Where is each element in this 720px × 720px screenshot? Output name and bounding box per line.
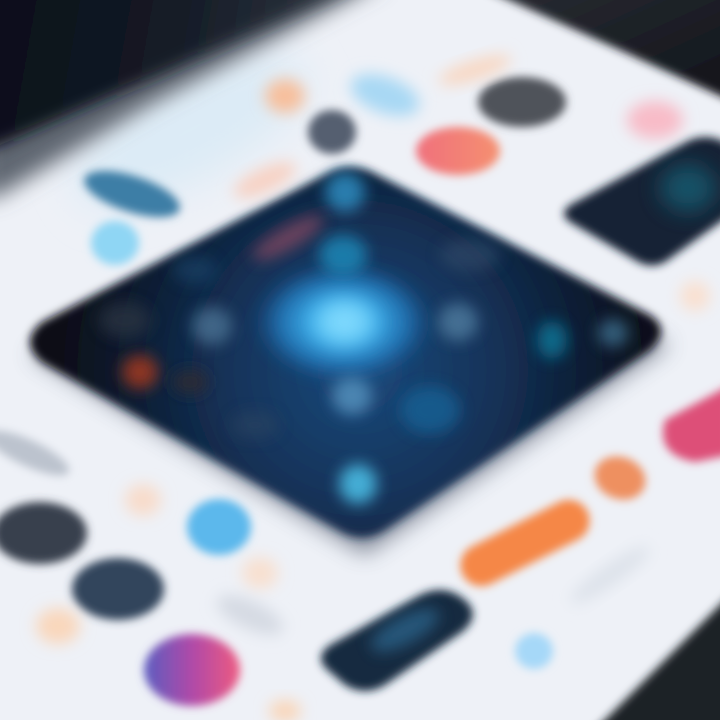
phone highlight xyxy=(365,600,445,660)
central glow xyxy=(251,260,435,384)
small orange dot xyxy=(269,700,301,720)
icons on paper: top area xyxy=(229,49,710,311)
navy round tile xyxy=(72,558,164,620)
node: left xyxy=(192,307,232,345)
dim panel: lower left xyxy=(231,411,279,439)
dim accent: left lower xyxy=(172,370,208,394)
grey transition band xyxy=(0,0,385,200)
orange dot xyxy=(265,79,305,113)
orange dot xyxy=(36,608,80,644)
blue dot: bottom right xyxy=(515,633,553,669)
peach dot lower xyxy=(242,557,278,589)
dim panel: left xyxy=(173,256,217,284)
central tablet device xyxy=(30,167,661,538)
node: far right xyxy=(537,321,567,359)
orange pill xyxy=(453,493,597,593)
dim panel: far left xyxy=(99,302,151,338)
phone: bottom centre xyxy=(321,590,473,691)
sky blue pill xyxy=(345,66,425,124)
dark backdrop: top left xyxy=(0,0,385,200)
dark backdrop: bottom right xyxy=(585,585,720,720)
dark round tile xyxy=(0,502,87,564)
peach bar left xyxy=(229,155,301,205)
crimson pill xyxy=(663,385,720,462)
red accent: top xyxy=(248,208,328,268)
pale text lines xyxy=(565,539,655,611)
phone glow xyxy=(660,164,716,212)
node: lower xyxy=(332,377,372,415)
peach dot xyxy=(125,484,161,516)
dim panel: upper right xyxy=(440,239,500,271)
dark circle xyxy=(478,77,566,127)
dark area xyxy=(0,0,365,150)
pale peach dot xyxy=(680,281,710,311)
blue card xyxy=(79,161,185,227)
node: right xyxy=(438,303,478,341)
pale grey card xyxy=(211,587,289,643)
paper tint: upper left xyxy=(52,25,328,235)
node: bottom xyxy=(339,464,377,504)
orange dot xyxy=(588,449,652,507)
grey knob xyxy=(308,110,356,154)
icons: bottom left xyxy=(0,422,301,720)
node: upper xyxy=(319,235,367,275)
gradient round tile xyxy=(144,634,240,706)
peach bar xyxy=(436,49,514,91)
cyan dot xyxy=(91,221,139,265)
red accent: left xyxy=(122,355,158,389)
node: far right edge xyxy=(598,319,628,347)
coral pill xyxy=(416,127,500,175)
device shadow xyxy=(30,175,670,555)
node: top xyxy=(325,172,365,212)
pink dot xyxy=(627,101,683,139)
blue dot xyxy=(187,499,251,555)
phone: upper right xyxy=(564,137,720,266)
tablet body xyxy=(30,167,661,538)
icons: upper left xyxy=(79,161,185,265)
icons: right side xyxy=(453,385,720,611)
node: lower right xyxy=(400,386,460,434)
grey bar xyxy=(0,422,74,484)
dark backdrop: top right xyxy=(465,0,720,105)
bright core xyxy=(319,302,371,342)
